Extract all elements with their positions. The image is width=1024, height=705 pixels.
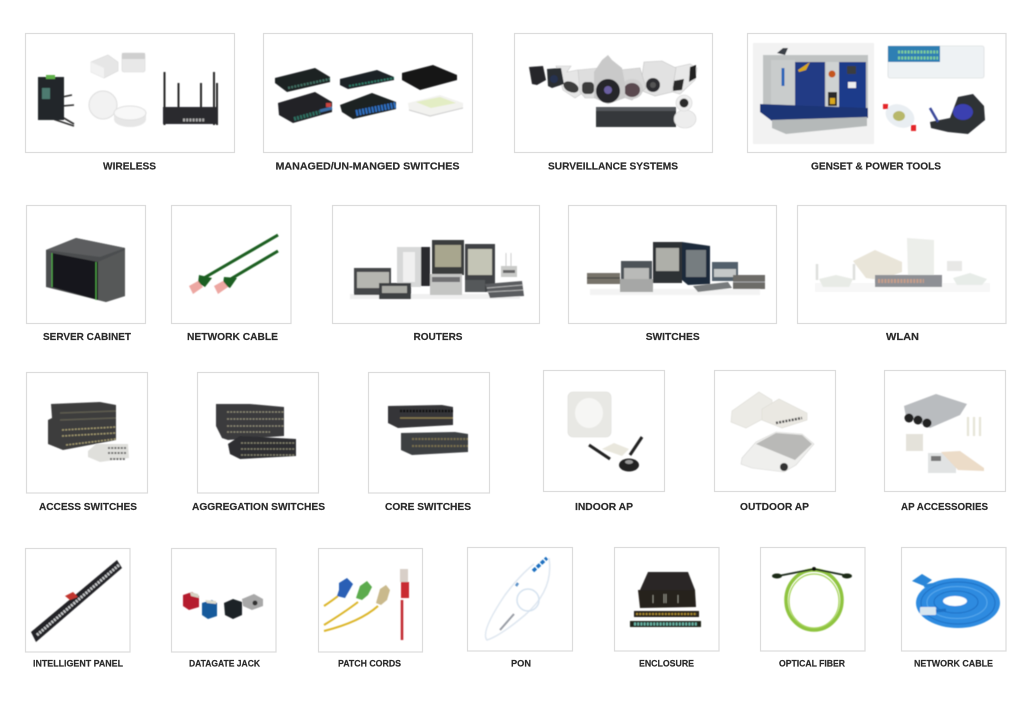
label: ROUTERS (414, 331, 462, 343)
icon: genset, AC, light, blower (753, 43, 985, 144)
icon: patch panel (31, 560, 122, 642)
panel: datagate jack (172, 548, 276, 670)
label: SURVEILLANCE SYSTEMS (548, 160, 678, 172)
label: GENSET & POWER TOOLS (811, 160, 941, 172)
icon: six small switches (275, 65, 463, 123)
panel: indoor AP (544, 370, 664, 513)
label: MANAGED/UN-MANGED SWITCHES (276, 160, 460, 172)
label: DATAGATE JACK (189, 658, 260, 670)
panel: optical fiber (760, 548, 865, 670)
label: OPTICAL FIBER (779, 658, 845, 670)
panel: enclosure (614, 548, 719, 670)
icon: coiled optical fibre (772, 567, 852, 630)
panel: access switches (26, 372, 148, 513)
icon: fibre enclosure drawer (630, 572, 701, 627)
panel: core switches (368, 372, 490, 513)
panel: aggregation switches (192, 372, 325, 513)
icon: cameras and recorder (529, 55, 697, 128)
panel: AP accessories (884, 370, 1006, 513)
label: INDOOR AP (575, 501, 633, 513)
icon: core switch pair (388, 405, 468, 455)
label: SWITCHES (646, 331, 700, 343)
icon: blue coiled cable (912, 574, 1000, 628)
icon: aggregation switch stack (216, 404, 296, 459)
icon: indoor access points (568, 392, 642, 472)
panel: WLAN (798, 206, 1006, 343)
panel: server cabinet (26, 206, 146, 343)
icon: green patch cables (189, 235, 278, 294)
label: AGGREGATION SWITCHES (192, 501, 325, 513)
icon: PON fibre (485, 558, 550, 640)
label: ENCLOSURE (639, 658, 694, 670)
label: PON (511, 658, 531, 670)
panel: genset and power tools (748, 34, 1006, 172)
label: PATCH CORDS (338, 658, 401, 670)
label: WIRELESS (103, 160, 156, 172)
panel: network cable blue (902, 548, 1006, 670)
panel: routers (332, 206, 540, 343)
panel: managed switches (264, 34, 472, 172)
panel: surveillance systems (514, 34, 712, 172)
icon: switch chassis (587, 242, 765, 295)
label: WLAN (886, 331, 919, 343)
panel: switches (568, 206, 776, 343)
panel: patch cords (318, 548, 422, 670)
label: SERVER CABINET (43, 331, 132, 343)
panel: network cable green (172, 206, 291, 343)
label: AP ACCESSORIES (901, 501, 988, 513)
icon: AP accessories (904, 394, 984, 473)
icon: WLAN access points (815, 238, 990, 292)
icon: access switch stack (48, 402, 129, 462)
label: NETWORK CABLE (914, 658, 993, 670)
label: OUTDOOR AP (740, 501, 809, 513)
label: INTELLIGENT PANEL (33, 658, 123, 670)
panel: outdoor AP (714, 370, 836, 513)
panel: intelligent panel (26, 548, 130, 670)
label: CORE SWITCHES (385, 501, 471, 513)
icon: outdoor access points (731, 392, 814, 472)
icon: wireless products (38, 53, 217, 127)
icon: router chassis (350, 240, 524, 299)
icon: fibre patch cords (324, 569, 409, 640)
icon: wall cabinet (46, 238, 125, 302)
panel: PON (468, 548, 572, 670)
panel: wireless (26, 34, 234, 172)
label: NETWORK CABLE (187, 331, 278, 343)
icon: four jacks (183, 592, 263, 619)
label: ACCESS SWITCHES (39, 501, 137, 513)
